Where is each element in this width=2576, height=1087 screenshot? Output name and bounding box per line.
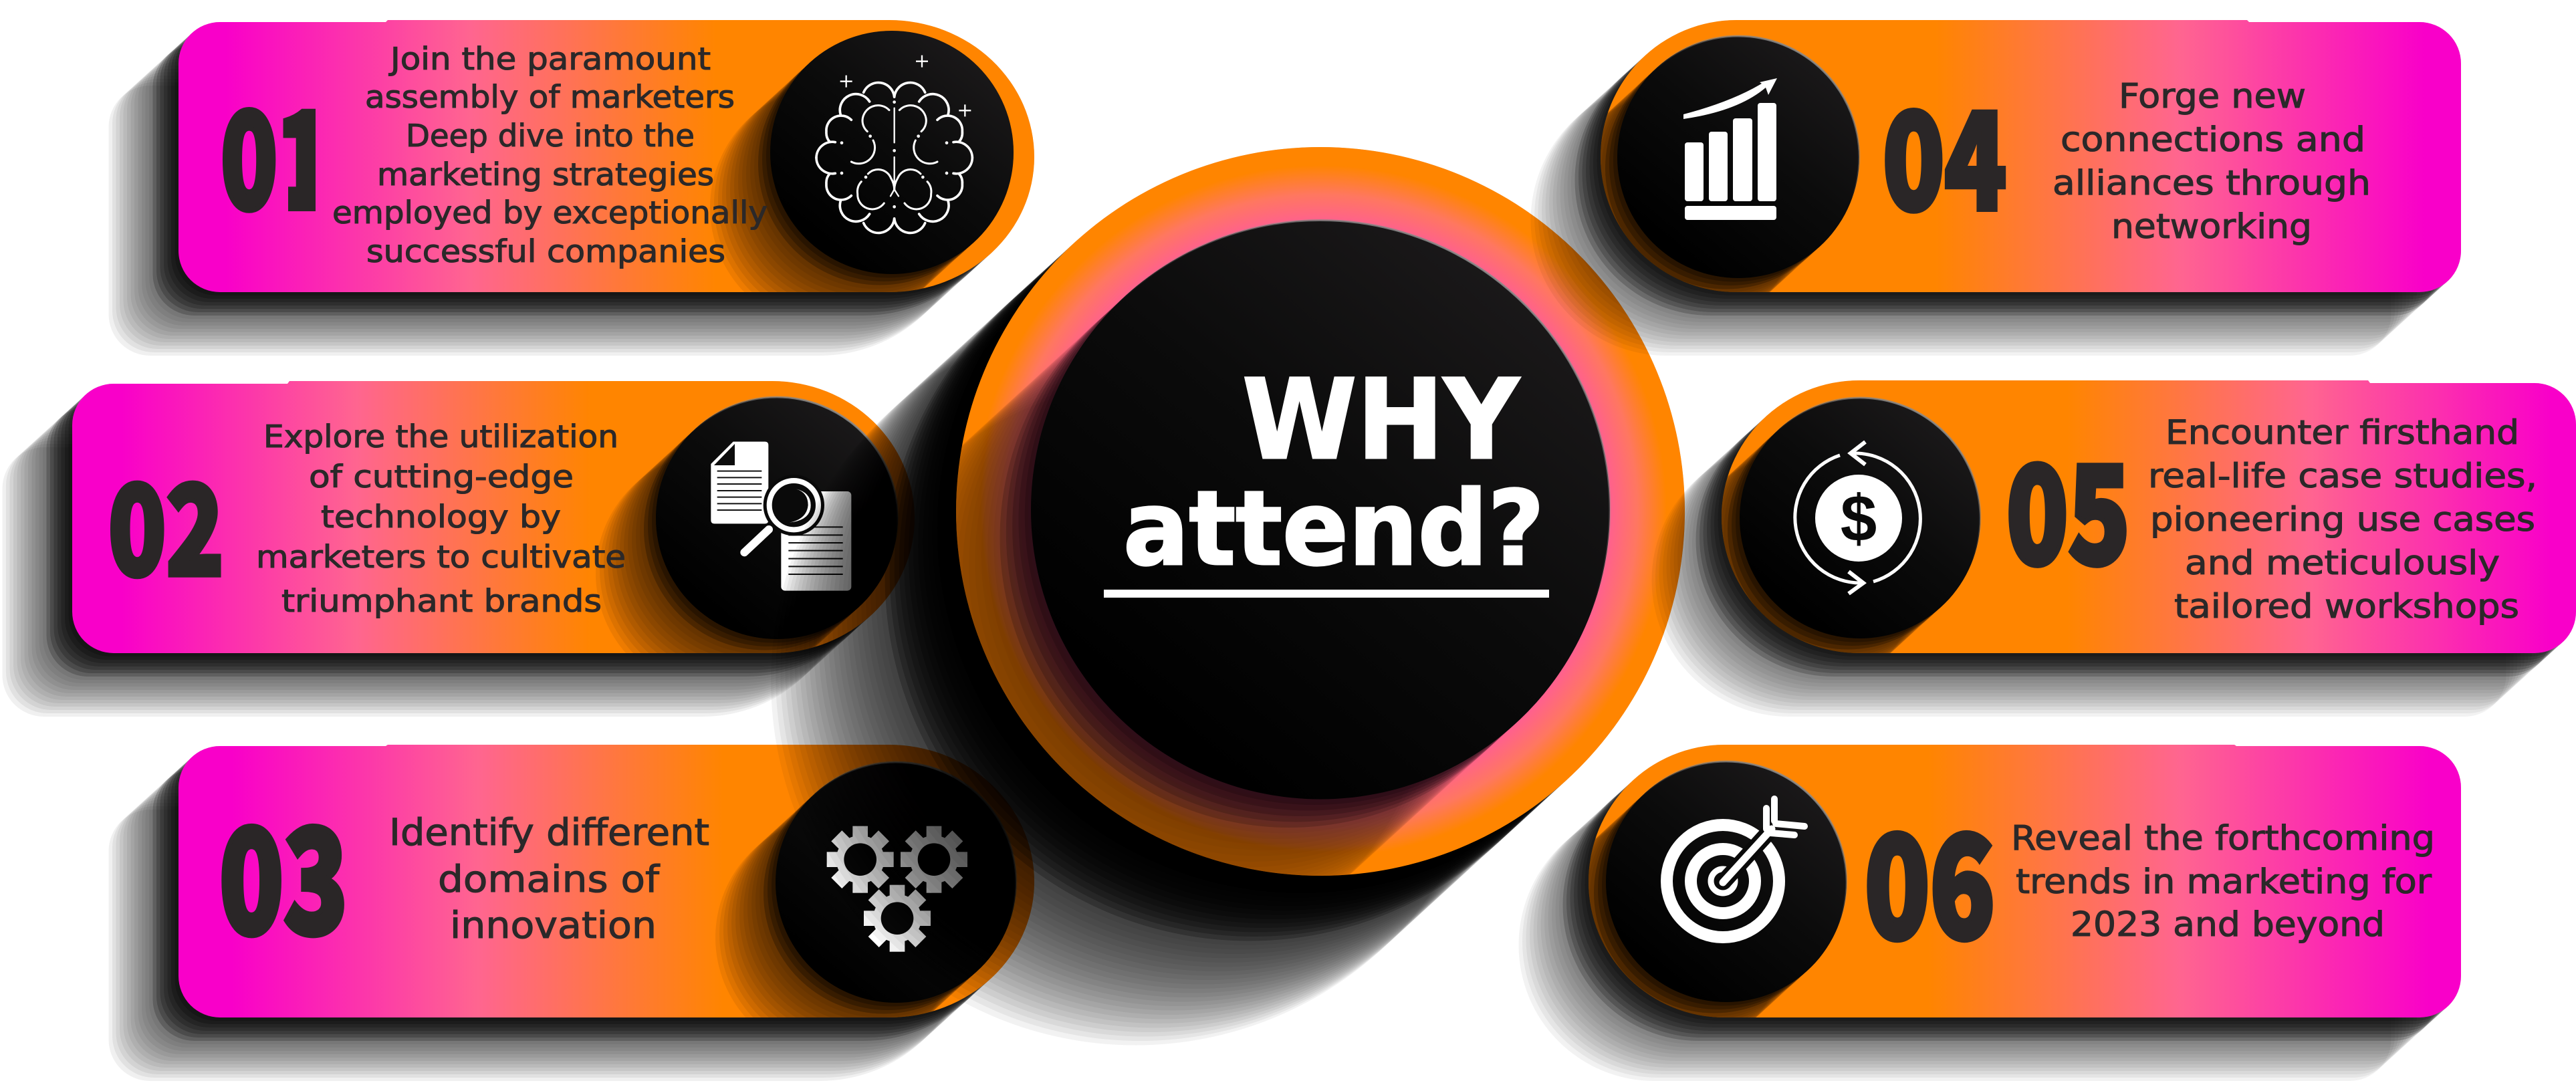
panel 04 text: networking xyxy=(2111,207,2312,247)
panel 03: domains of innovation xyxy=(108,745,1034,1081)
panel 05 text: Encounter firsthand xyxy=(2165,413,2519,452)
icon: documents and magnifier xyxy=(711,442,851,591)
center circle: WHY attend? xyxy=(771,147,1685,1046)
panel 02 text: marketers to cultivate xyxy=(256,539,626,575)
panel 01: assembly of marketers xyxy=(108,20,1034,356)
panel 01 text xyxy=(332,41,768,269)
panel 02 black disc xyxy=(656,397,898,639)
center black disc xyxy=(1031,221,1610,800)
panel 03 long shadow xyxy=(108,745,1034,1081)
panel 04: networking xyxy=(1531,20,2461,356)
panel 06 disc shadow xyxy=(1546,761,1847,1058)
number 05: 05 xyxy=(2006,408,2130,603)
panel 06 text: 2023 and beyond xyxy=(2071,905,2385,945)
panel 06: forthcoming trends xyxy=(1519,745,2461,1081)
panel 06 text: Reveal the forthcoming xyxy=(2011,819,2435,858)
panel 04 long shadow xyxy=(1531,20,2461,356)
icon: gears xyxy=(827,826,967,952)
panel 04 text: alliances through xyxy=(2053,164,2371,203)
panel 02 text xyxy=(256,418,626,619)
icon: target with dart xyxy=(1667,799,1804,937)
panel 06 gradient pill xyxy=(1589,745,2461,1017)
panel 01 text: successful companies xyxy=(366,233,725,269)
panel 05 disc shadow xyxy=(1679,398,1980,694)
panel 01 long shadow xyxy=(108,20,1034,356)
panel 05 text: pioneering use cases xyxy=(2150,500,2535,539)
panel 02 text: triumphant brands xyxy=(281,583,602,619)
panel 04 text: Forge new xyxy=(2119,77,2306,116)
panel 03 disc shadow xyxy=(715,778,1005,1017)
icon: brain xyxy=(816,55,972,233)
panel 06 long shadow xyxy=(1519,745,2461,1081)
number 03: 03 xyxy=(219,766,348,975)
heading: WHY attend? xyxy=(1104,356,1549,598)
panel 04 disc shadow xyxy=(1557,36,1859,333)
panel 01 text: Deep dive into the xyxy=(406,118,695,154)
panel 01 text: Join the paramount xyxy=(388,41,711,77)
panel 03 text xyxy=(389,811,709,947)
panel 01 text: marketing strategies xyxy=(377,156,714,193)
panel 05 long shadow xyxy=(1651,380,2576,717)
number 02: 02 xyxy=(108,431,224,611)
panel 03 gradient pill xyxy=(179,745,1034,1017)
panel 03 text: Identify different xyxy=(389,811,709,854)
panel 06 black disc xyxy=(1606,761,1847,1002)
panel 05 text: tailored workshops xyxy=(2174,587,2519,626)
panel 03 text: domains of xyxy=(438,858,661,900)
center gradient ring xyxy=(956,147,1685,876)
panel 01 black disc xyxy=(770,31,1014,274)
panel 06 text: trends in marketing for xyxy=(2016,862,2432,902)
panel 06 text xyxy=(2011,819,2435,945)
panel 02 long shadow xyxy=(3,381,915,717)
panel 02 text: technology by xyxy=(321,499,561,535)
panel 01 text: employed by exceptionally xyxy=(332,195,768,231)
panel 04 text: connections and xyxy=(2061,120,2365,160)
panel 05: case studies xyxy=(1651,380,2576,717)
number 04: 04 xyxy=(1883,55,2006,249)
heading: WHY attend?: WHY xyxy=(1242,356,1520,484)
center circle long shadow xyxy=(771,147,1685,1046)
icon: dollar coin with cycle arrows xyxy=(1795,442,1920,594)
panel 01 disc shadow xyxy=(710,31,1014,292)
panel 05 text: and meticulously xyxy=(2185,544,2500,582)
panel 01 gradient pill xyxy=(179,20,1034,292)
panel 05 black disc xyxy=(1740,398,1980,638)
number 06: 06 xyxy=(1865,774,1995,979)
panel 02 text: Explore the utilization xyxy=(263,418,618,455)
panel 02 text: of cutting-edge xyxy=(309,459,574,495)
panel 05 gradient pill xyxy=(1722,380,2576,653)
panel 01 text: assembly of marketers xyxy=(365,79,735,115)
panel 03 black disc xyxy=(776,762,1016,1003)
number 01: 01 xyxy=(221,53,333,247)
panel 03 text: innovation xyxy=(450,904,657,947)
panel 04 text xyxy=(2053,77,2371,247)
panel 02 disc shadow xyxy=(596,402,858,653)
panel 04 black disc xyxy=(1617,36,1859,278)
heading: WHY attend?: attend? xyxy=(1123,469,1544,589)
panel 02: cutting-edge technology xyxy=(3,381,915,717)
panel 04 gradient pill xyxy=(1601,20,2461,292)
icon: dollar coin with cycle arrows: $ xyxy=(1841,481,1877,555)
icon: rising bar chart xyxy=(1683,78,1777,220)
panel 05 text xyxy=(2148,413,2537,626)
center disc shadow on ring xyxy=(956,278,1605,876)
panel 02 gradient pill xyxy=(72,381,915,653)
panel 05 text: real-life case studies, xyxy=(2148,457,2537,495)
